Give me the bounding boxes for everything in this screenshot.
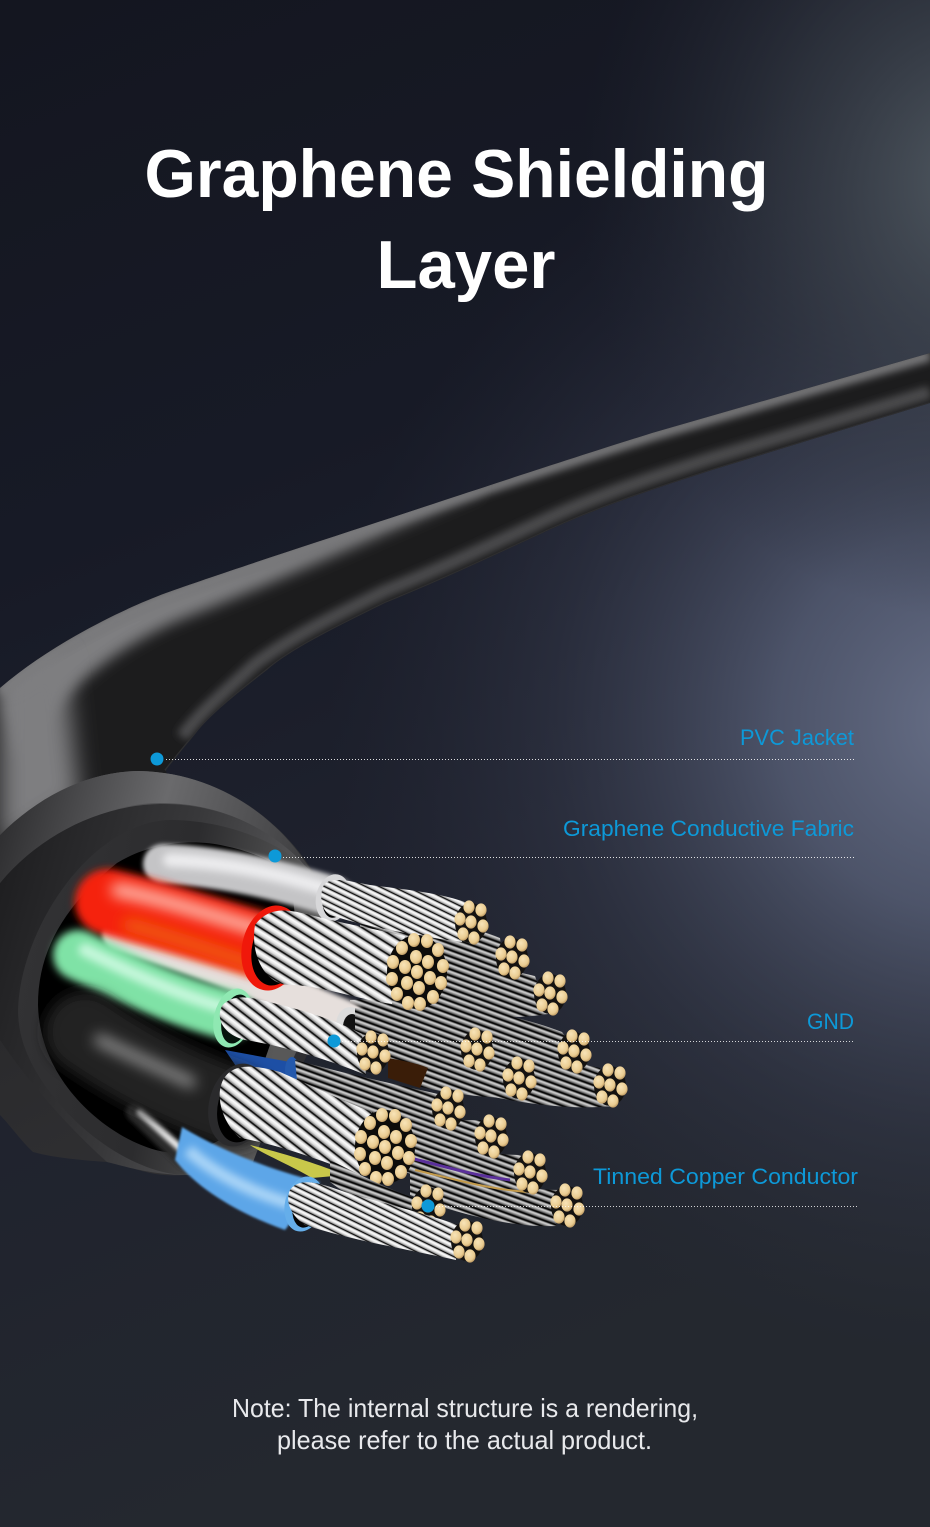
red wire [108, 890, 449, 1011]
black wire [85, 1032, 417, 1186]
callout: Graphene Conductive Fabric [268, 816, 854, 862]
callout: PVC Jacket [150, 725, 854, 766]
jacket rings and hole [0, 771, 330, 1175]
silver conductor stub [135, 1112, 185, 1160]
title: Layer [376, 227, 556, 303]
callout: Graphene Conductive Fabric: Graphene Conductive Fabric [563, 816, 854, 841]
title: Graphene Shielding [144, 136, 768, 212]
light blue wire [175, 1127, 485, 1263]
lower strands fan [345, 1086, 585, 1228]
cable jacket running from right edge [0, 340, 930, 1175]
dark blue wire [225, 1050, 440, 1127]
callout: GND [328, 1009, 854, 1048]
callout: GND: GND [807, 1009, 854, 1034]
jacket end outer ring [0, 771, 326, 1175]
title [144, 136, 768, 303]
back strands, upper fan [350, 900, 612, 1107]
lower white wire [120, 935, 537, 1101]
note: Note: The internal structure is a rendering, [232, 1393, 698, 1423]
tip 13 strands [330, 1160, 446, 1232]
white wire [163, 860, 489, 945]
green wire [78, 950, 391, 1075]
tips: back upper [495, 935, 628, 1108]
note: please refer to the actual product. [277, 1425, 652, 1455]
callout: PVC Jacket: PVC Jacket [740, 725, 854, 750]
callout: Tinned Copper Conductor: Tinned Copper Conductor [593, 1164, 858, 1189]
wire group [78, 860, 628, 1263]
note [232, 1393, 698, 1455]
callout: Tinned Copper Conductor [422, 1164, 858, 1212]
